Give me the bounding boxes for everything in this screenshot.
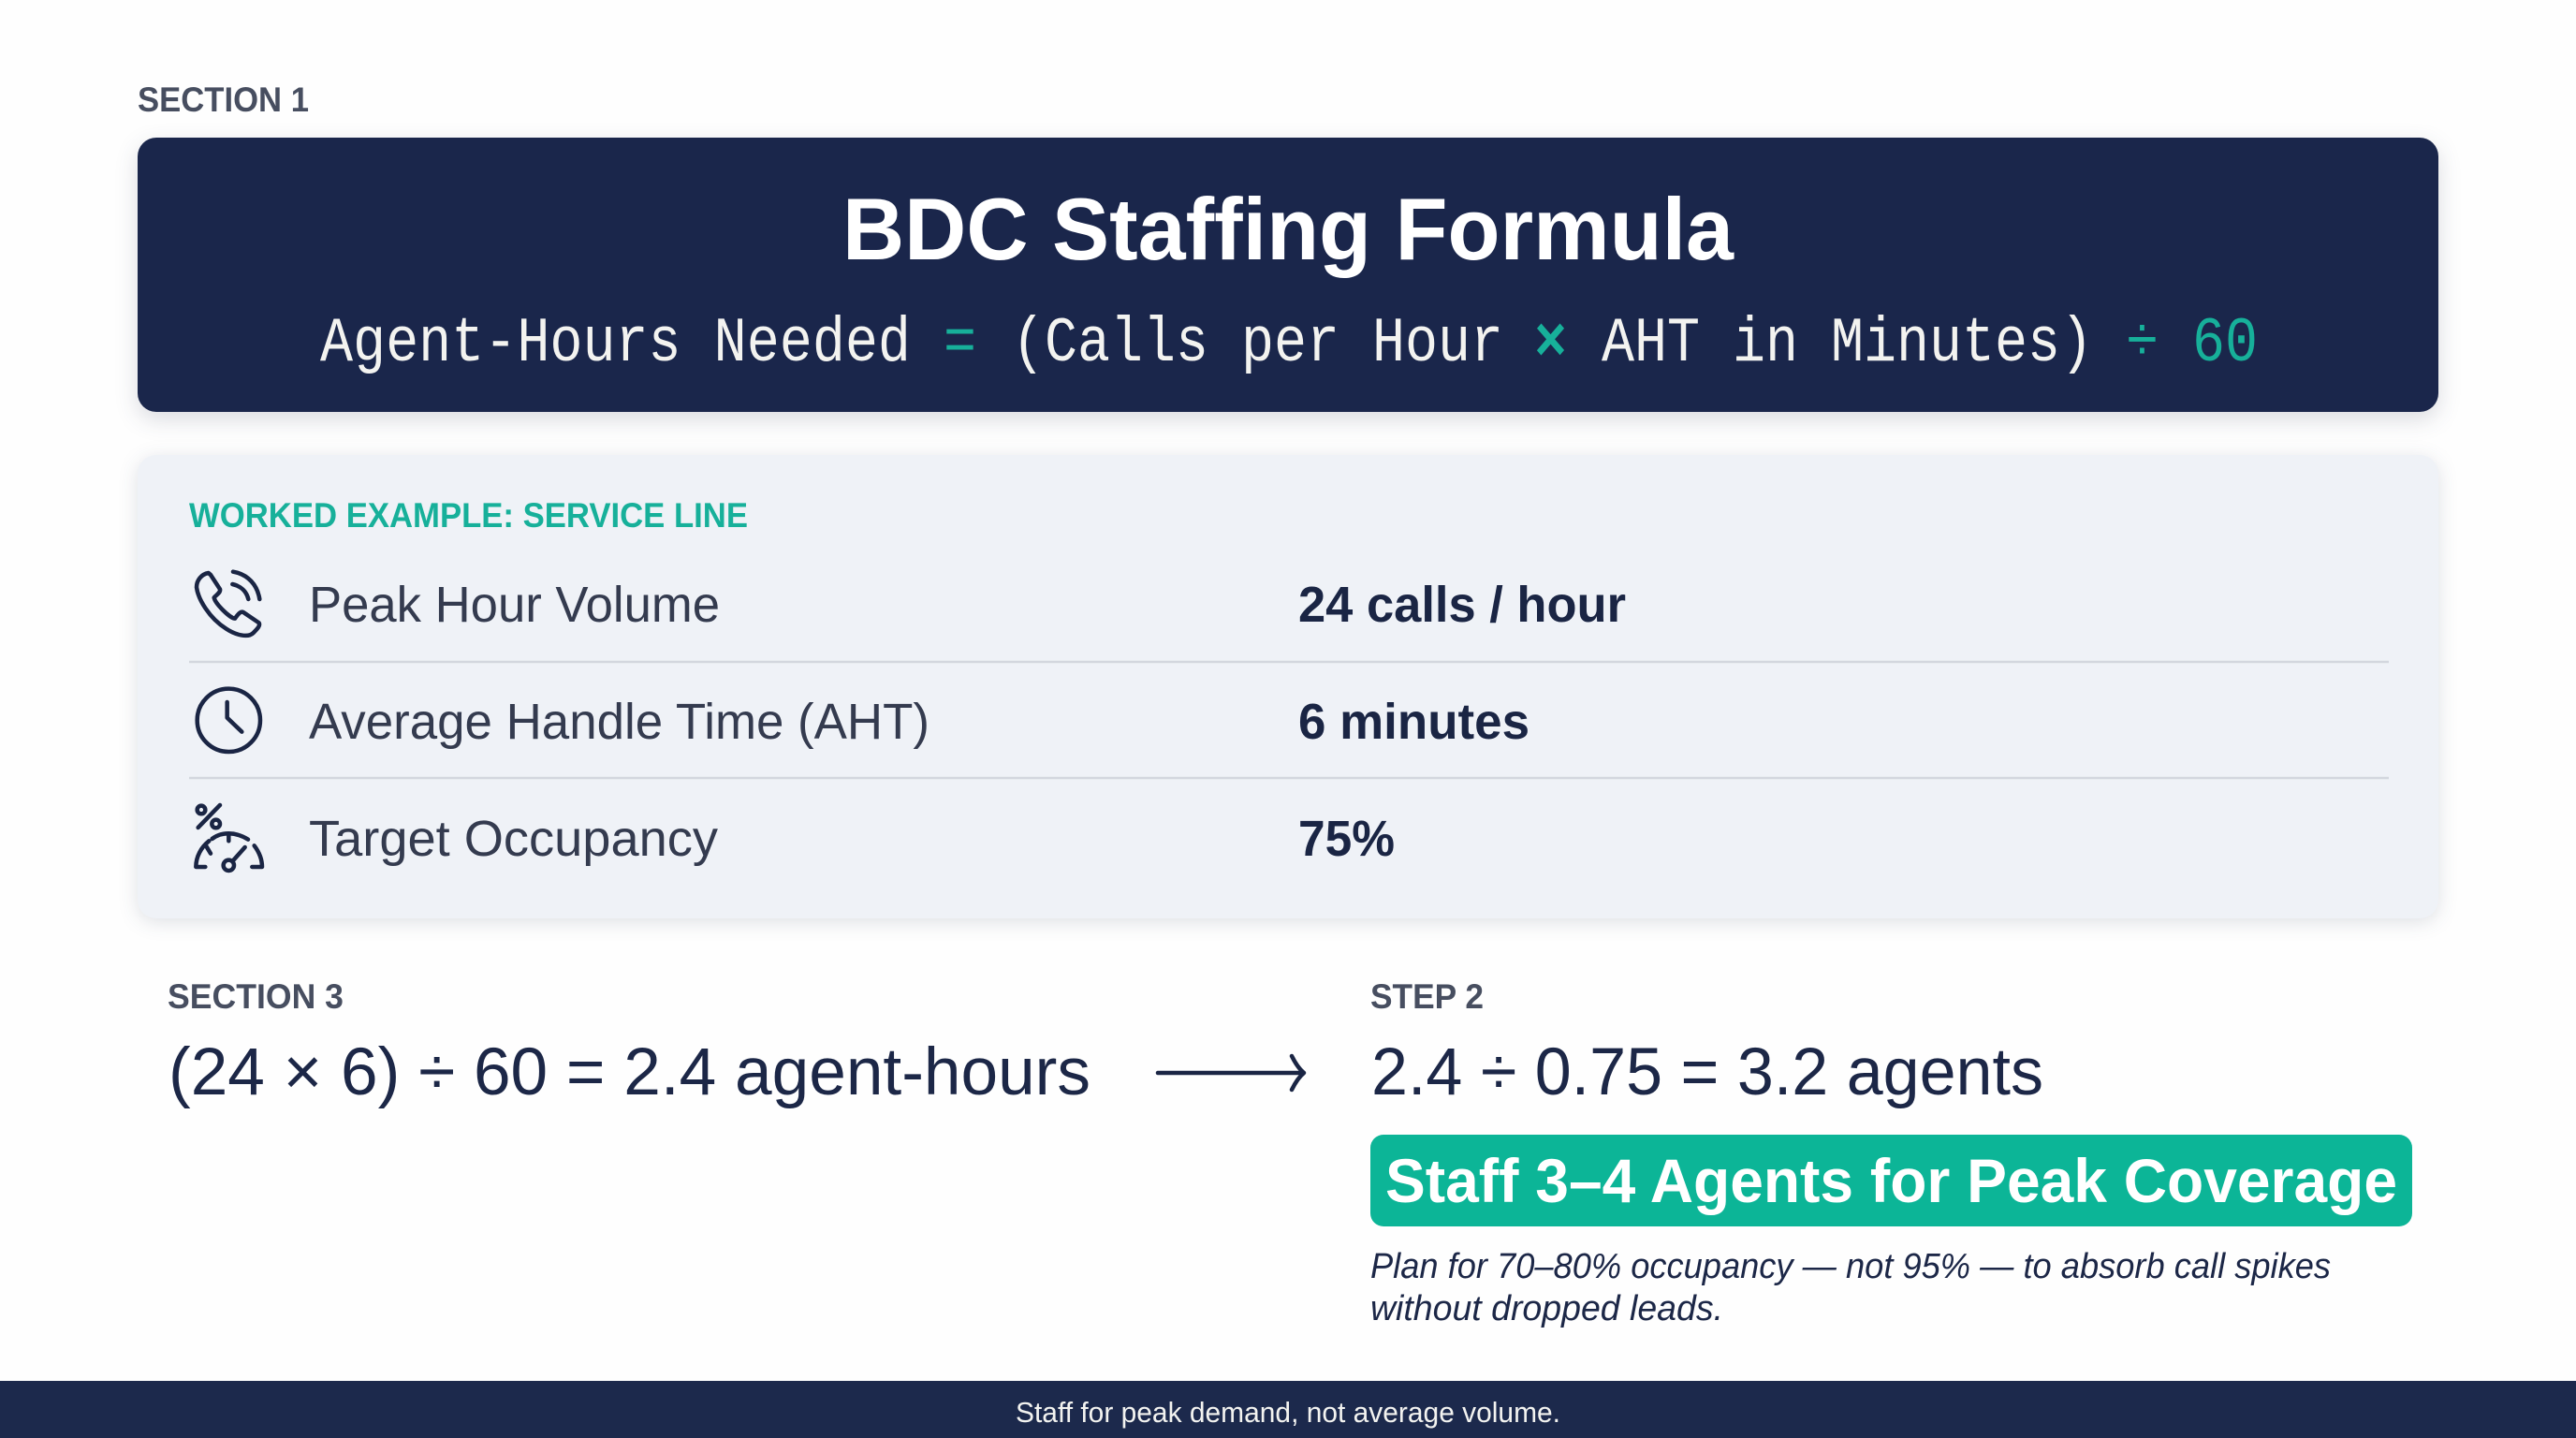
worked example background — [138, 455, 2438, 918]
formula: AHT in Minutes) — [1602, 308, 2093, 380]
formula — [320, 308, 2258, 380]
footer bar — [0, 1381, 2576, 1438]
formula: × — [1534, 308, 1567, 380]
formula: ÷ — [2126, 308, 2159, 380]
callout: staffing recommendation: Staff 3–4 Agents for Peak Coverage — [1385, 1146, 2397, 1215]
footer bar: Staff for peak demand, not average volume. — [1016, 1396, 1560, 1429]
formula: = — [944, 308, 976, 380]
step 1 calculation: (24 × 6) ÷ 60 = 2.4 agent-hours — [168, 1035, 1090, 1109]
formula: 60 — [2192, 308, 2258, 380]
row value: calls per hour: 24 calls / hour — [1298, 577, 1626, 633]
row value: occupancy percent: 75% — [1298, 811, 1395, 867]
note: occupancy guidance: Plan for 70–80% occupancy — not 95% — to absorb call spikes — [1370, 1247, 2331, 1286]
title: BDC Staffing Formula — [842, 180, 1734, 278]
row label: average handle time: Average Handle Time (AHT) — [309, 694, 929, 750]
formula: Agent-Hours Needed — [320, 308, 911, 380]
row label: target occupancy: Target Occupancy — [309, 811, 718, 867]
header background — [138, 138, 2438, 412]
note: occupancy guidance: without dropped leads. — [1370, 1289, 1723, 1328]
icon: occupancy gauge — [196, 805, 262, 871]
formula: (Calls per Hour — [1012, 308, 1503, 380]
panel: worked example — [138, 455, 2438, 918]
row value: minutes: 6 minutes — [1298, 694, 1530, 750]
section label: section 1: SECTION 1 — [138, 81, 309, 119]
row label: peak hour volume: Peak Hour Volume — [309, 577, 720, 633]
worked example heading: WORKED EXAMPLE: SERVICE LINE — [189, 496, 748, 535]
icon: phone — [197, 572, 259, 636]
step label: step 2: STEP 2 — [1370, 977, 1484, 1016]
panel: formula header — [138, 138, 2438, 412]
step 2 calculation: 2.4 ÷ 0.75 = 3.2 agents — [1371, 1035, 2043, 1109]
section label: section 3: SECTION 3 — [168, 977, 344, 1016]
arrow: step 1 to step 2 — [1158, 1056, 1304, 1090]
note: occupancy guidance — [1370, 1247, 2331, 1328]
icon: clock — [198, 689, 260, 752]
